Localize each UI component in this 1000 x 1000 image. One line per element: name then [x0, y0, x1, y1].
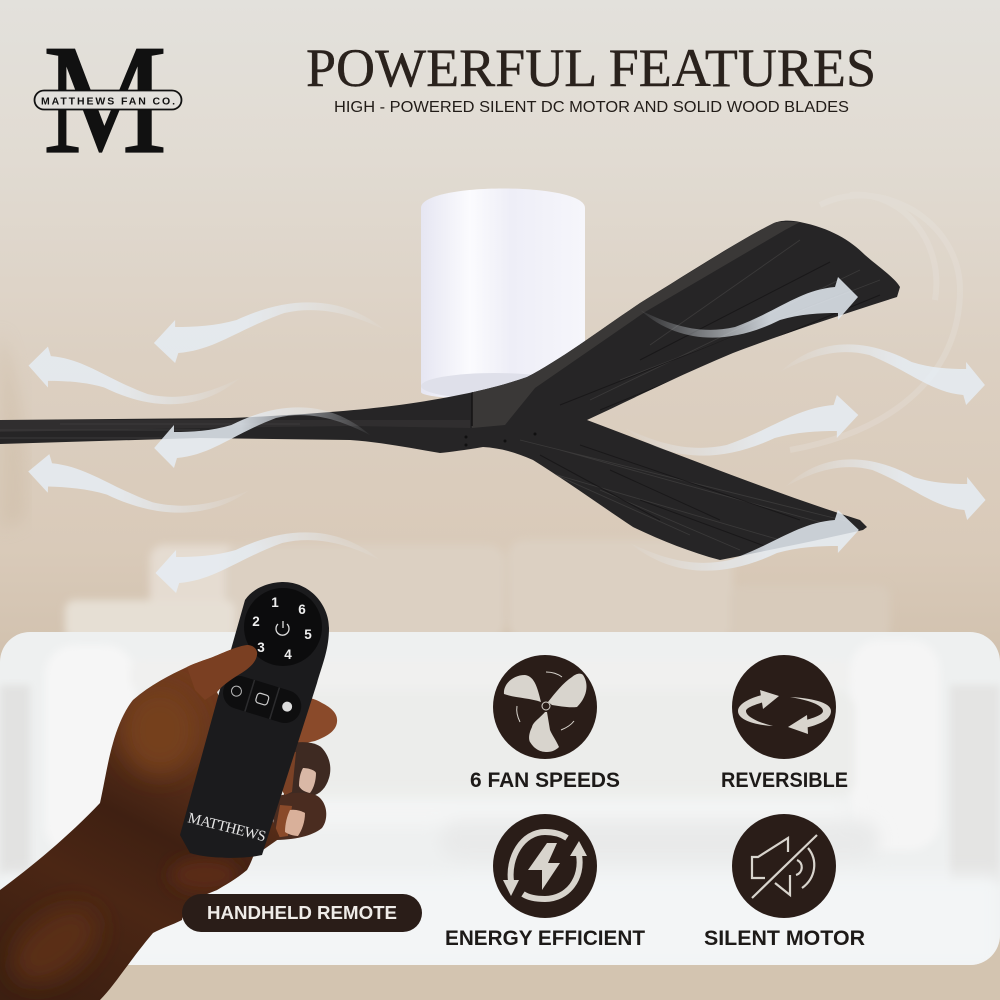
remote dial	[244, 588, 322, 666]
dial numbers: 6	[298, 602, 306, 617]
feature: energy efficient	[445, 814, 645, 950]
subtitle: HIGH - POWERED SILENT DC MOTOR AND SOLID WOOD BLADES	[334, 99, 849, 116]
title: POWERFUL FEATURES	[306, 38, 876, 98]
remote brand: MATTHEWS	[186, 810, 268, 845]
logo: MATTHEWS FAN CO.	[41, 96, 175, 108]
label: ENERGY EFFICIENT	[445, 927, 645, 950]
label: 6 FAN SPEEDS	[470, 769, 620, 792]
remote buttons	[219, 672, 305, 727]
dial numbers: 4	[284, 647, 292, 662]
icon: energy cycle	[493, 814, 597, 918]
faint air swirl	[790, 195, 960, 450]
dial numbers: 3	[257, 640, 265, 655]
icon: muted speaker	[732, 814, 836, 918]
arrow: right 3	[780, 344, 985, 405]
feature: silent motor	[704, 814, 865, 950]
dial numbers: 1	[271, 595, 279, 610]
arrow: right 5	[630, 510, 859, 571]
ceiling fan	[0, 188, 900, 560]
dial numbers: 2	[252, 614, 260, 629]
logo: M	[43, 12, 167, 186]
arrow: right 1	[640, 277, 858, 338]
feature: 6 fan speeds	[470, 655, 620, 792]
fingers	[255, 697, 337, 850]
label: SILENT MOTOR	[704, 927, 865, 950]
airflow arrows	[27, 277, 986, 593]
hand holding remote	[0, 582, 337, 1000]
arrow: right 4	[785, 459, 986, 520]
thumb	[187, 645, 257, 700]
arrow: left 2	[29, 347, 240, 404]
label: REVERSIBLE	[721, 769, 848, 792]
arrow: left 1	[154, 302, 385, 363]
power icon	[276, 621, 289, 635]
icon: fan	[493, 655, 597, 759]
arrow: right 2	[625, 395, 858, 456]
arrow: left 5	[155, 532, 380, 593]
icon: rotation arrows	[732, 655, 836, 759]
remote control	[180, 582, 329, 858]
arrow: left 4	[27, 453, 251, 515]
blades	[0, 220, 900, 560]
handheld remote label	[182, 894, 422, 932]
arrow: left 3	[154, 407, 370, 468]
bottom frosted panel	[0, 632, 1000, 970]
dial numbers: 5	[304, 627, 312, 642]
handheld remote label: HANDHELD REMOTE	[207, 902, 397, 923]
dial numbers	[252, 595, 312, 662]
fan canopy	[421, 188, 585, 400]
feature: reversible	[721, 655, 848, 792]
arm and palm	[0, 650, 280, 1000]
